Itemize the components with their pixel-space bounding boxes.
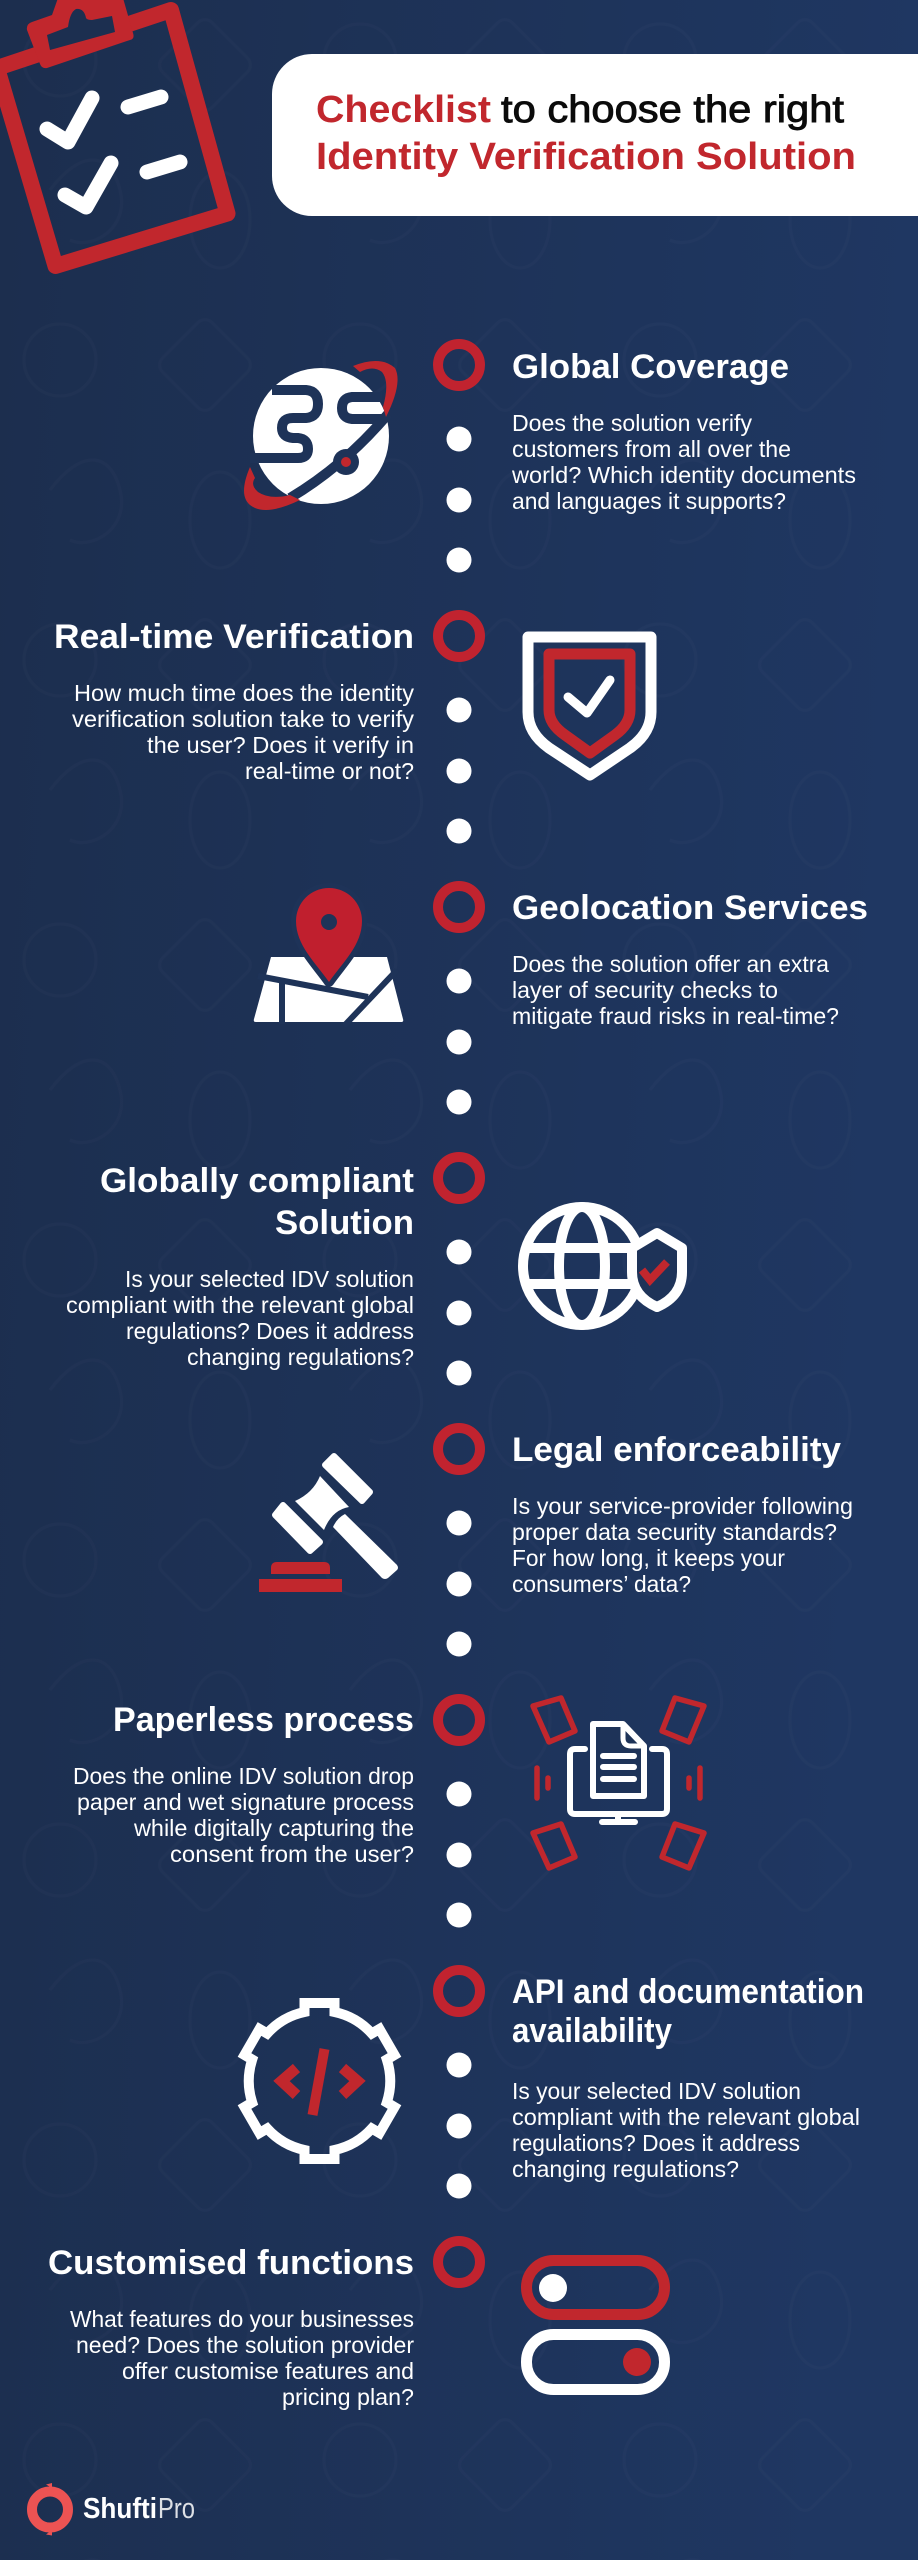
heading: Globally compliant [100,1162,414,1200]
text block: layer of security checks to [512,977,778,1003]
text block: Does the solution verify [512,410,752,436]
title: Checklist [316,89,491,131]
step 5: Legal enforceability [259,1428,853,1656]
heading: Solution [275,1204,414,1242]
heading: Global Coverage [512,348,789,386]
heading: Real-time Verification [54,618,414,656]
step 1: Global Coverage [244,344,856,572]
text block: changing regulations? [512,2156,739,2182]
text block: regulations? Does it address [126,1318,414,1344]
text block: How much time does the identity [74,680,414,706]
logo: ShuftiPro: Pro [158,2493,195,2525]
heading: Geolocation Services [512,889,868,927]
heading [512,1973,864,2050]
title: to choose the right [501,89,844,131]
title panel [272,54,918,216]
text block: changing regulations? [187,1344,414,1370]
text block [511,410,856,514]
text block: Does the solution offer an extra [512,951,829,977]
step 4: Globally compliant Solution [66,1157,682,1386]
icon: map pin [254,888,403,1026]
text block: mitigate fraud risks in real-time? [512,1003,839,1029]
logo: ShuftiPro [32,2483,195,2536]
icon: globe with orbit [244,361,398,510]
heading [100,1162,414,1242]
text block: Is your selected IDV solution [125,1266,414,1292]
step 2: Real-time Verification [54,615,651,844]
timeline marker [438,2241,480,2283]
step 8: Customised functions [48,2241,664,2410]
timeline marker [438,615,480,844]
text block [512,951,839,1029]
icon: globe with shield [523,1207,682,1325]
text block [512,2078,860,2182]
icon: gear with code [244,2003,394,2159]
icon: gavel [259,1456,398,1592]
text block [73,1763,414,1867]
text block [72,680,415,784]
step 3: Geolocation Services [254,886,868,1114]
text block: offer customise features and [122,2358,414,2384]
text block: the user? Does it verify in [147,732,414,758]
text block: Is your service-provider following [512,1493,853,1519]
text block: consent from the user? [170,1841,414,1867]
text block: proper data security standards? [512,1519,837,1545]
text block [70,2306,414,2410]
icon: shield check [528,637,651,775]
text block: pricing plan? [282,2384,414,2410]
timeline marker [438,1970,480,2198]
step 6: Paperless process [73,1698,704,1928]
heading: Paperless process [113,1701,414,1739]
text block: What features do your businesses [70,2306,414,2332]
text block: and languages it supports? [512,488,786,514]
timeline marker [438,344,480,572]
text block [66,1266,414,1370]
heading: availability [512,2012,672,2050]
text block: paper and wet signature process [77,1789,414,1815]
timeline marker [438,1157,480,1386]
timeline marker [438,1699,480,1928]
icon: clipboard checklist [0,0,228,266]
text block: compliant with the relevant global [66,1292,414,1318]
timeline marker [438,886,480,1114]
text block: consumers’ data? [512,1571,691,1597]
icon: document on monitor [533,1698,704,1868]
text block: regulations? Does it address [512,2130,800,2156]
step 7: API and documentation availability [244,1970,864,2198]
text block: while digitally capturing the [133,1815,414,1841]
text block: For how long, it keeps your [512,1545,785,1571]
title [316,89,856,178]
heading: Legal enforceability [512,1431,841,1469]
heading: API and documentation [512,1973,864,2011]
text block [512,1493,853,1597]
text block: compliant with the relevant global [512,2104,860,2130]
icon: toggle switches [526,2260,664,2390]
title: Identity Verification Solution [316,136,856,178]
text block: real-time or not? [245,758,414,784]
text block: verification solution take to verify [72,706,415,732]
text block: Does the online IDV solution drop [73,1763,414,1789]
heading: Customised functions [48,2244,414,2282]
timeline marker [438,1428,480,1656]
text block: customers from all over the [512,436,791,462]
text block: need? Does the solution provider [76,2332,414,2358]
logo: ShuftiPro: Shufti [83,2493,157,2525]
text block: world? Which identity documents [511,462,856,488]
text block: Is your selected IDV solution [512,2078,801,2104]
